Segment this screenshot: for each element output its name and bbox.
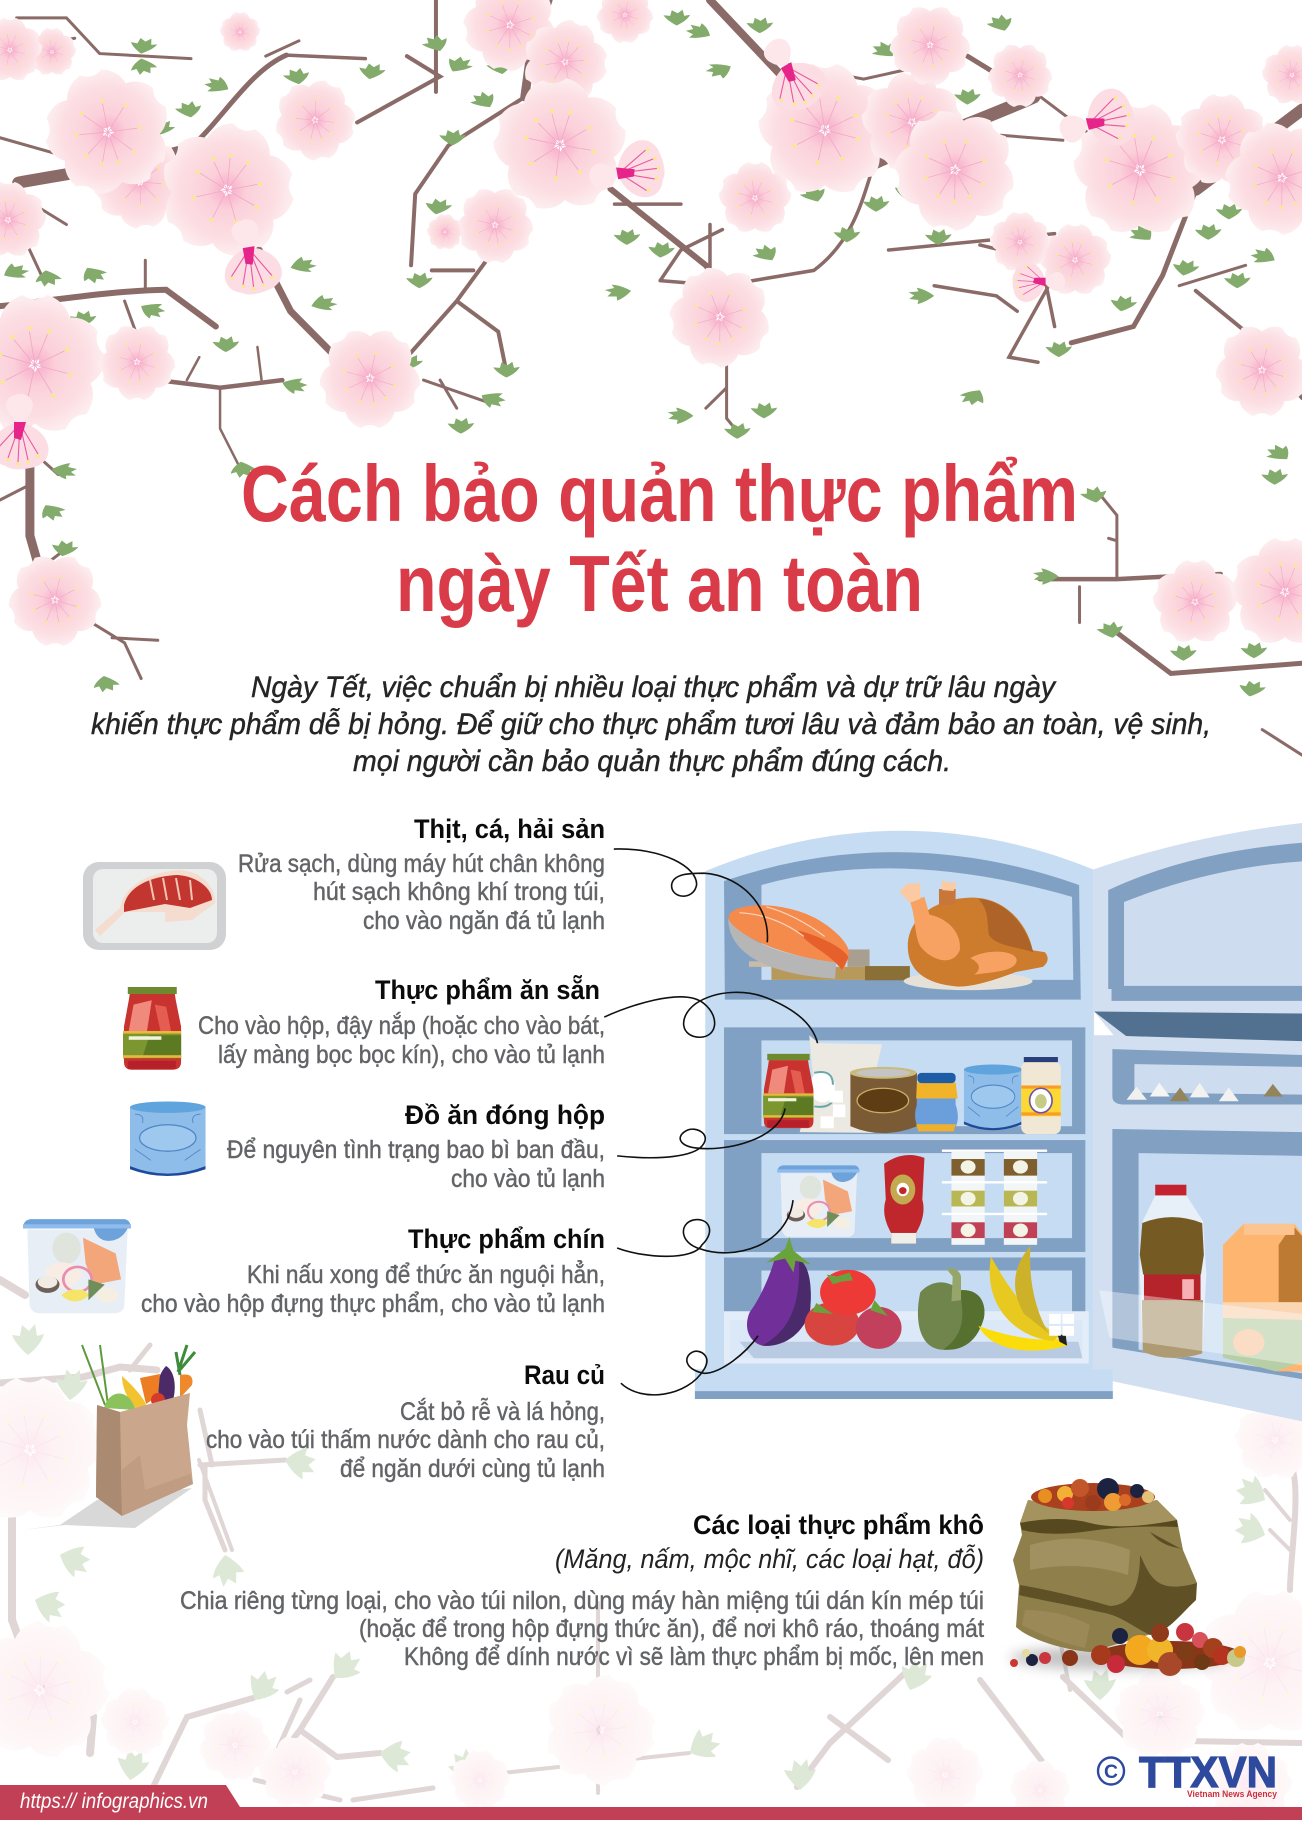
item: cooked food: Thực phẩm chín [408, 1224, 605, 1254]
intro paragraph: khiến thực phẩm dễ bị hỏng. Để giữ cho thực phẩm tươi lâu và đảm bảo an toàn, vệ sinh, [91, 708, 1211, 741]
title: ngày Tết an toàn [396, 539, 923, 628]
callout: meat [614, 849, 767, 942]
food: container [777, 1165, 860, 1237]
item: canned food [227, 1100, 605, 1193]
intro paragraph [91, 671, 1211, 778]
item: canned food: Đồ ăn đóng hộp [405, 1100, 605, 1130]
item: vegetables: để ngăn dưới cùng tủ lạnh [340, 1455, 605, 1483]
icon: canned food tub [130, 1101, 206, 1176]
food: sugar bag [800, 1035, 882, 1133]
bottle in door [1140, 1185, 1206, 1358]
food: jar [763, 1054, 813, 1128]
item: canned food: cho vào tủ lạnh [451, 1165, 605, 1193]
food: tomatoes [805, 1270, 902, 1349]
item: vegetables [206, 1360, 605, 1483]
item: ready-to-eat food: lấy màng bọc bọc kín), cho vào tủ lạnh [218, 1041, 605, 1069]
title [241, 449, 1078, 628]
top blossom branches illustration [0, 0, 1302, 755]
callout: cooked [617, 1200, 793, 1256]
agency wordmark: TTXVN [1139, 1748, 1277, 1797]
refrigerator illustration [695, 823, 1302, 1422]
callout lines [604, 849, 818, 1395]
item: ready-to-eat food: Thực phẩm ăn sẵn [375, 973, 600, 1005]
food: salmon on boxes [728, 905, 910, 980]
item: dried food: Các loại thực phẩm khô [693, 1510, 984, 1540]
food: brown can [850, 1067, 917, 1133]
intro paragraph: Ngày Tết, việc chuẩn bị nhiều loại thực phẩm và dự trữ lâu ngày [251, 671, 1057, 704]
milk carton [1223, 1224, 1302, 1371]
item: ready-to-eat food: Cho vào hộp, đậy nắp (hoặc cho vào bát, [198, 1011, 605, 1040]
background blossom pattern, bottom [0, 1280, 1302, 1821]
food: blue honey jar [915, 1073, 958, 1131]
food: eggplant [747, 1237, 811, 1346]
food: green pepper [918, 1268, 984, 1350]
intro paragraph: mọi người cần bảo quản thực phẩm đúng cách. [353, 745, 951, 778]
food: ketchup bottle [884, 1155, 924, 1244]
item: vegetables: Rau củ [524, 1360, 605, 1390]
item: ready-to-eat food [198, 973, 605, 1069]
food: bananas [978, 1246, 1074, 1351]
food: mayonnaise jar [1021, 1057, 1061, 1134]
fridge body [695, 831, 1113, 1399]
item: meat, fish, seafood [238, 814, 605, 935]
copyright mark: C [1104, 1762, 1118, 1783]
icon: grocery bag with vegetables [22, 1345, 195, 1530]
door shelf [1099, 1290, 1302, 1365]
icon: meat tray [83, 862, 226, 950]
website url: https:// infographics.vn [20, 1790, 208, 1813]
icon: burlap sack of dried food [1010, 1478, 1246, 1676]
title: Cách bảo quản thực phẩm [241, 449, 1078, 538]
food: blue tub [964, 1065, 1022, 1130]
icon: jar [123, 987, 181, 1070]
item: dried food: (Măng, nấm, mộc nhĩ, các loại hạt, đỗ) [555, 1543, 984, 1574]
food: yogurt cups [942, 1150, 1047, 1245]
item: meat, fish, seafood: Rửa sạch, dùng máy hút chân không [238, 850, 605, 878]
callout: canned [617, 1108, 785, 1158]
agency tagline: Vietnam News Agency [1187, 1789, 1277, 1799]
item: canned food: Để nguyên tình trạng bao bì ban đầu, [227, 1136, 605, 1164]
item: cooked food [141, 1224, 605, 1318]
item: dried food: Không để dính nước vì sẽ làm thực phẩm bị mốc, lên men [404, 1643, 984, 1671]
item: dried food [180, 1510, 984, 1671]
callout: ready-to-eat [604, 992, 818, 1043]
footer tab [0, 1785, 240, 1807]
copyright mark [1098, 1758, 1124, 1784]
item: meat, fish, seafood: Thịt, cá, hải sản [414, 814, 605, 844]
icon: food container [23, 1219, 131, 1313]
item: cooked food: cho vào hộp đựng thực phẩm, cho vào tủ lạnh [141, 1290, 605, 1318]
item: meat, fish, seafood: hút sạch không khí trong túi, [313, 878, 605, 906]
fridge door [1091, 823, 1302, 1422]
item: dried food: (hoặc để trong hộp đựng thức ăn), để nơi khô ráo, thoáng mát [359, 1615, 984, 1643]
item: cooked food: Khi nấu xong để thức ăn nguội hẳn, [247, 1259, 605, 1289]
callout: vegetables [621, 1336, 758, 1395]
item: vegetables: cho vào túi thấm nước dành cho rau củ, [206, 1426, 605, 1454]
item: dried food: Chia riêng từng loại, cho vào túi nilon, dùng máy hàn miệng túi dán kín mép túi [180, 1587, 984, 1615]
item: vegetables: Cắt bỏ rễ và lá hỏng, [400, 1397, 605, 1426]
logo: TTXVN [1098, 1748, 1277, 1799]
footer band [0, 1785, 1302, 1820]
item: meat, fish, seafood: cho vào ngăn đá tủ lạnh [363, 907, 605, 935]
food: roast chicken on plate [899, 881, 1048, 990]
